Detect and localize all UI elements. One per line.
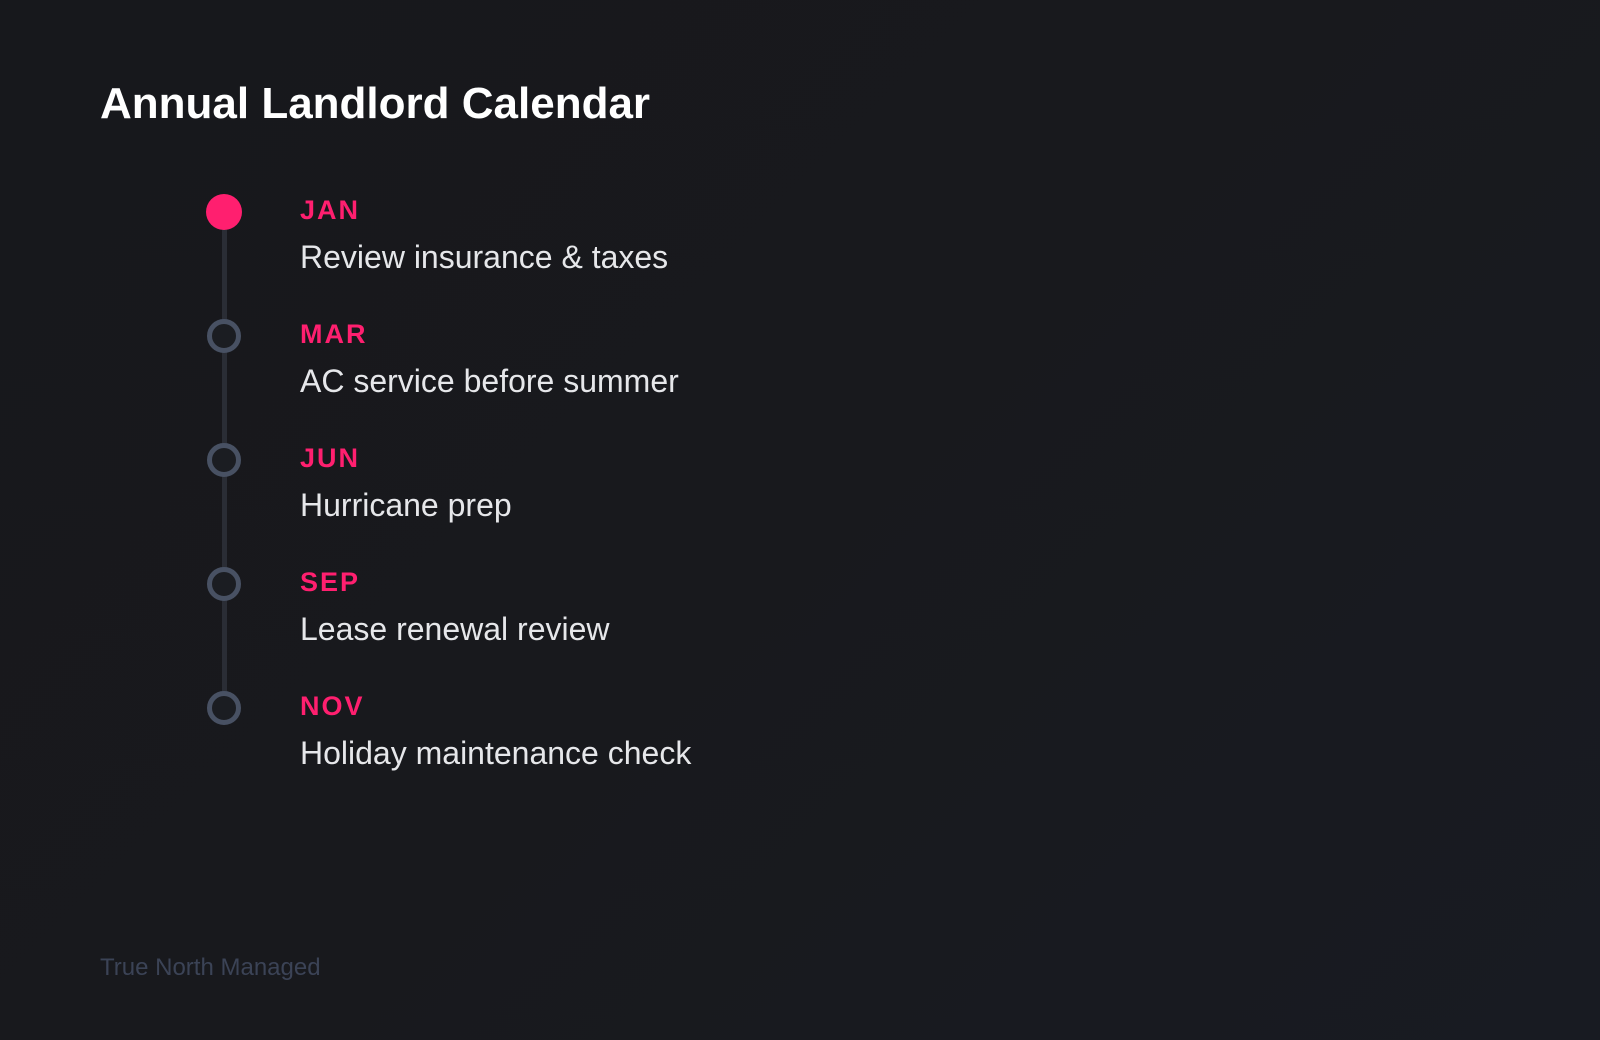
entry: SEP: Lease renewal review bbox=[300, 611, 610, 647]
entry: NOV bbox=[300, 691, 692, 771]
entry: JAN: JAN bbox=[300, 195, 360, 225]
entry: JUN: JUN bbox=[300, 443, 360, 473]
entry: SEP: SEP bbox=[300, 567, 360, 597]
entry: MAR: MAR bbox=[300, 319, 368, 349]
entry: NOV: NOV bbox=[300, 691, 365, 721]
footer: True North Managed bbox=[100, 954, 321, 981]
marker: JUN bbox=[207, 443, 241, 477]
entry: JAN: Review insurance & taxes bbox=[300, 239, 668, 275]
entry: NOV: Holiday maintenance check bbox=[300, 735, 691, 771]
marker: MAR bbox=[207, 319, 241, 353]
entry: SEP bbox=[300, 567, 610, 647]
marker: SEP bbox=[207, 567, 241, 601]
entry: MAR bbox=[300, 319, 679, 399]
marker: NOV bbox=[207, 691, 241, 725]
entry: JUN bbox=[300, 443, 512, 523]
timeline bbox=[206, 194, 692, 771]
entry: MAR: AC service before summer bbox=[300, 363, 679, 399]
entry: JUN: Hurricane prep bbox=[300, 487, 512, 523]
marker: JAN (active) bbox=[206, 194, 242, 230]
title: Annual Landlord Calendar bbox=[100, 79, 650, 128]
timeline connector line bbox=[222, 212, 227, 708]
entry: JAN bbox=[300, 195, 668, 275]
